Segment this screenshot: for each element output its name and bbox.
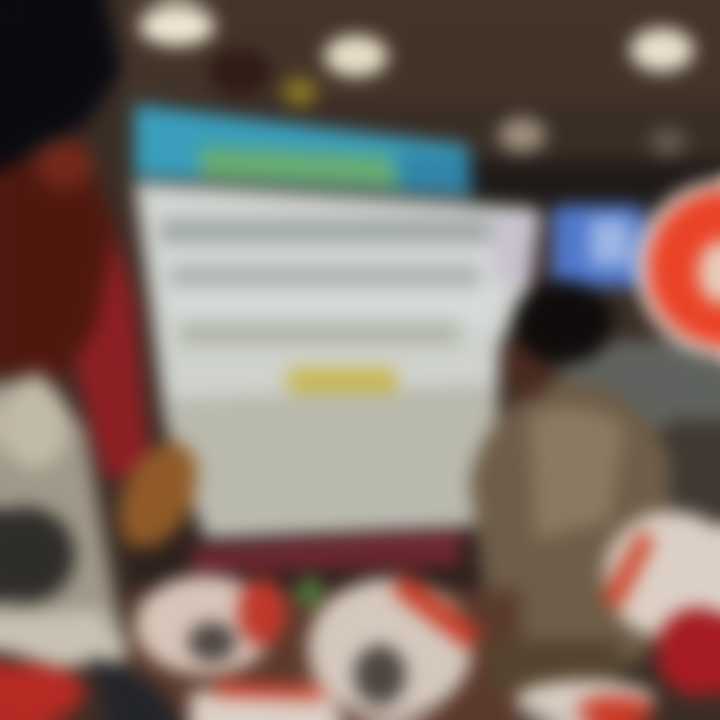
poster header band <box>134 104 472 195</box>
red poster base <box>190 530 462 572</box>
ceiling lights <box>139 6 694 157</box>
person left <box>0 0 212 650</box>
red circular sign <box>636 180 720 356</box>
red shirt <box>75 210 150 480</box>
poster body <box>134 182 538 538</box>
face <box>0 135 115 380</box>
crowd caps at the bottom <box>0 511 720 720</box>
shoulder <box>0 370 130 650</box>
hair <box>0 0 122 175</box>
person right <box>470 280 720 690</box>
poster text rows <box>160 218 490 392</box>
hand <box>104 430 212 560</box>
blue screen <box>552 205 644 287</box>
poster <box>134 104 540 538</box>
